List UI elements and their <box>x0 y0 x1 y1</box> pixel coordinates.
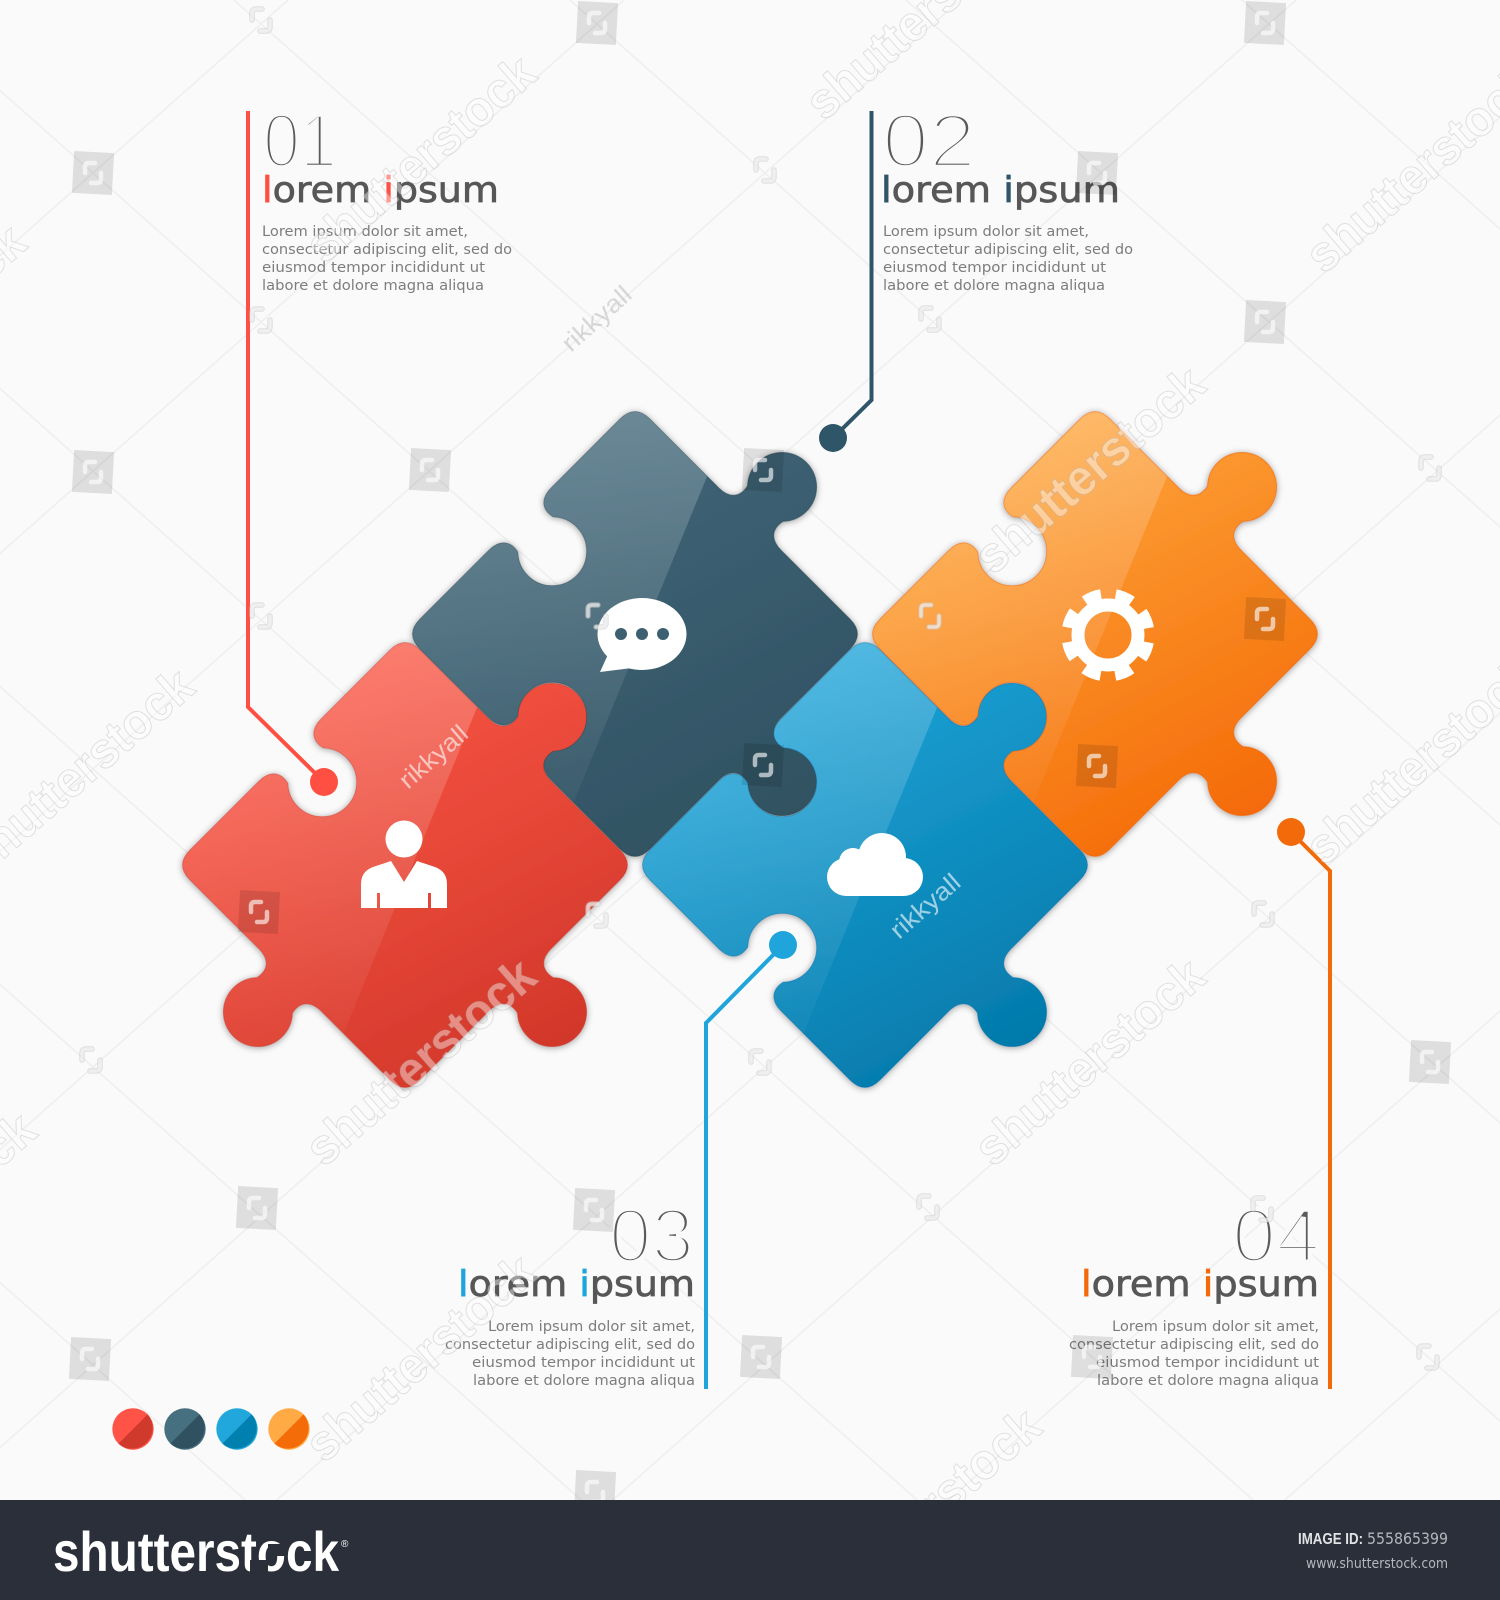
watermark layer: shutterstock <box>294 947 546 1176</box>
body text 02 <box>883 224 1133 294</box>
leader line 1 <box>248 111 324 782</box>
registered mark: ® <box>341 1539 349 1550</box>
body text 04: eiusmod tempor incididunt ut <box>1096 1355 1320 1371</box>
body text 01: eiusmod tempor incididunt ut <box>262 260 486 276</box>
watermark layer: rikkyall <box>885 868 966 945</box>
body text 03 <box>445 1319 696 1389</box>
image id: IMAGE ID: <box>1298 1531 1363 1548</box>
body text 03: Lorem ipsum dolor sit amet, <box>488 1319 695 1335</box>
body text 02: consectetur adipiscing elit, sed do <box>883 242 1133 258</box>
icon: speech bubble <box>598 598 686 672</box>
watermark layer: rikkyall <box>394 720 474 795</box>
image id number: 555865399 <box>1367 1529 1448 1548</box>
heading block 04 <box>1069 1194 1320 1389</box>
body text 01: labore et dolore magna aliqua <box>262 278 484 294</box>
leader dot 2 <box>819 424 847 452</box>
body text 03: labore et dolore magna aliqua <box>473 1373 695 1389</box>
watermark layer: shutterstock <box>294 1243 546 1472</box>
body text 02: Lorem ipsum dolor sit amet, <box>883 224 1089 240</box>
icon: cloud <box>827 833 923 896</box>
number 04: 04 <box>1232 1194 1320 1279</box>
title 04: lorem ipsum <box>1081 1264 1319 1305</box>
number 01: 01 <box>263 99 337 184</box>
icon: gear <box>1068 595 1148 675</box>
legend swatch slate <box>164 1408 206 1450</box>
body text 04: labore et dolore magna aliqua <box>1097 1373 1319 1389</box>
heading block 02 <box>881 99 1133 294</box>
watermark layer: shutterstock <box>963 355 1215 584</box>
icon: person <box>361 820 447 908</box>
body text 02: eiusmod tempor incididunt ut <box>883 260 1107 276</box>
leader dot 1 <box>310 768 338 796</box>
body text 03: eiusmod tempor incididunt ut <box>472 1355 696 1371</box>
footer bar <box>0 1500 1500 1600</box>
piece 4: orange <box>868 408 1322 862</box>
legend swatch red <box>112 1408 154 1450</box>
watermark layer: shutterstock <box>294 44 546 273</box>
leader line 3 <box>706 945 783 1389</box>
body text 03: consectetur adipiscing elit, sed do <box>445 1337 695 1353</box>
piece 2: dark slate <box>408 408 862 862</box>
leader dot 3 <box>769 931 797 959</box>
body text 04: Lorem ipsum dolor sit amet, <box>1112 1319 1319 1335</box>
heading block 01 <box>262 99 512 294</box>
title 01: lorem ipsum <box>262 170 499 211</box>
body text 01: consectetur adipiscing elit, sed do <box>262 242 512 258</box>
footer logo: shutterstock <box>53 1520 340 1583</box>
body text 02: labore et dolore magna aliqua <box>883 278 1105 294</box>
body text 01 <box>262 224 512 294</box>
body text 01: Lorem ipsum dolor sit amet, <box>262 224 468 240</box>
puzzle pieces <box>178 408 1322 1093</box>
number 02: 02 <box>882 99 976 184</box>
legend swatch blue <box>216 1408 258 1450</box>
watermark layer: shutterstock <box>963 947 1215 1176</box>
piece 3: blue <box>638 639 1092 1093</box>
website: www.shutterstock.com <box>1306 1556 1448 1572</box>
body text 04 <box>1069 1319 1320 1389</box>
title 03: lorem ipsum <box>458 1264 695 1305</box>
colour legend <box>112 1408 310 1450</box>
leader line 2 <box>833 111 872 438</box>
body text 04: consectetur adipiscing elit, sed do <box>1069 1337 1319 1353</box>
number 03: 03 <box>609 1194 694 1279</box>
leader line 4 <box>1291 832 1330 1389</box>
piece 1: red <box>178 639 632 1092</box>
title 02: lorem ipsum <box>881 170 1120 211</box>
legend swatch orange <box>268 1408 310 1450</box>
watermark layer: rikkyall <box>556 280 637 357</box>
heading block 03 <box>445 1194 696 1389</box>
leader dot 4 <box>1277 818 1305 846</box>
